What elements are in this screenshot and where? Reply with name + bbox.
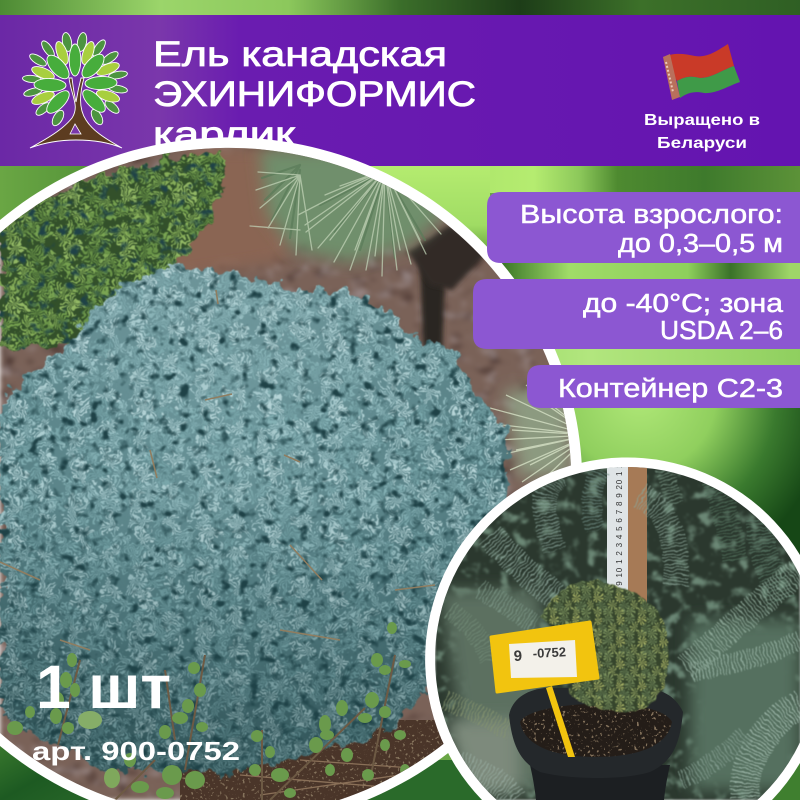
- info box: frost hardiness: [473, 279, 800, 349]
- pine foliage top: [250, 150, 452, 276]
- yellow tag: 9: [513, 648, 523, 665]
- lime leaves: [30, 40, 121, 107]
- title: ЭХИНИФОРМИС: [153, 75, 476, 114]
- yellow tag: -0752: [532, 644, 566, 661]
- article number: арт. 900-0752: [32, 736, 240, 766]
- black pot: [509, 688, 683, 800]
- trunk: [30, 78, 122, 148]
- info box: frost hardiness: до -40°C; зона: [583, 290, 784, 318]
- flag caption: Беларуси: [657, 135, 747, 152]
- flag caption: [644, 112, 760, 152]
- info box: container: Контейнер С2-3: [558, 375, 783, 403]
- ground under shrub: [180, 720, 444, 800]
- dark pine trunk: [407, 224, 484, 346]
- title: Ель канадская: [153, 35, 447, 74]
- main leaves: [34, 44, 117, 117]
- spruce branches: [445, 470, 800, 800]
- photo: large spruce shrub: [0, 137, 590, 800]
- spruce shrub dome: [0, 266, 510, 772]
- measuring stake: [607, 467, 647, 604]
- pine needles right: [490, 381, 571, 484]
- outer leaves: [22, 32, 128, 128]
- info box: height: Высота взрослого:: [520, 201, 783, 229]
- conifer backdrop: [435, 467, 800, 800]
- small spruce plant: [540, 580, 669, 712]
- flag caption: Выращено в: [644, 112, 760, 129]
- yellow tag: [491, 622, 598, 757]
- small leafy shrubs: [7, 622, 411, 800]
- icon: Belarus flag: [663, 44, 740, 100]
- icon: tree logo: [22, 32, 128, 148]
- title: [153, 35, 476, 154]
- photo: young plant in pot with measuring tape: [425, 454, 800, 800]
- dry twigs: [0, 290, 435, 650]
- quantity label: 1 шт: [36, 653, 171, 721]
- header band: [0, 15, 800, 166]
- info box: frost hardiness: USDA 2–6: [660, 317, 783, 345]
- thuja shrub: [0, 150, 223, 350]
- info box: container: [527, 365, 800, 408]
- reddish path: [176, 148, 286, 272]
- info box: height: до 0,3–0,5 м: [618, 230, 783, 258]
- title: карлик: [153, 115, 296, 154]
- info box: height: [487, 192, 800, 263]
- measuring stake: 8 9 10 1 2 3 4 5 6 7 8 9 20 1 2 3: [615, 454, 624, 594]
- soil backdrop: [0, 145, 572, 800]
